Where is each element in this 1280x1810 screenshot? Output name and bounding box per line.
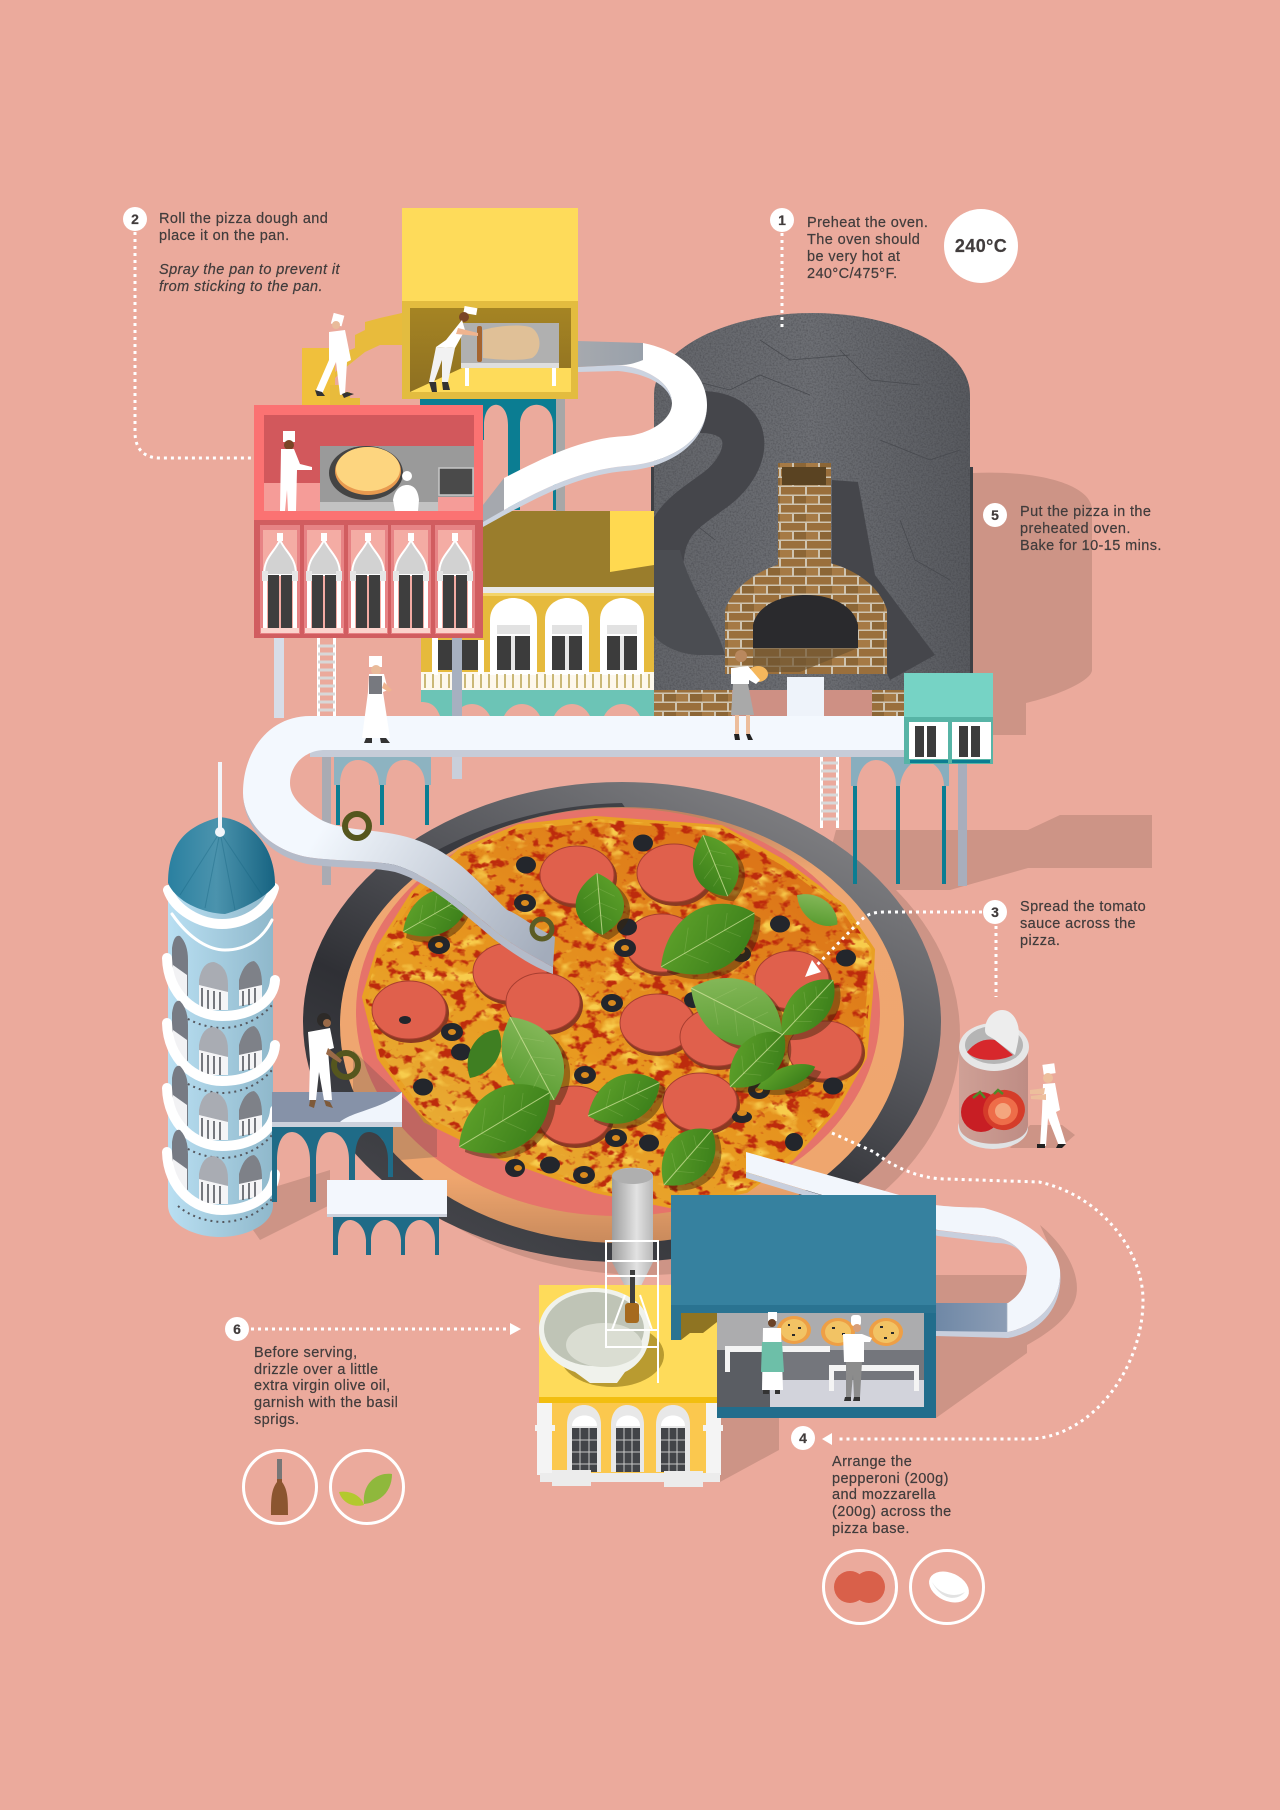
ribbon edge	[243, 793, 553, 974]
collar bands	[168, 888, 274, 924]
middle walkway ribbon	[243, 716, 905, 974]
brick arch body	[725, 560, 887, 674]
oven window	[439, 468, 473, 495]
scaffold frame	[606, 1241, 658, 1383]
brick pizza oven	[651, 463, 904, 717]
number 6: 6	[233, 1321, 241, 1337]
scaffold and oil dispenser	[606, 1241, 658, 1383]
temperature badge	[944, 209, 1018, 283]
balustrade	[421, 672, 654, 690]
roof sunlit corner	[610, 511, 654, 572]
straight white band	[340, 716, 905, 750]
tables	[725, 1346, 919, 1391]
step 4 text: (200g) across the	[832, 1504, 952, 1520]
arrow head	[510, 1323, 521, 1335]
badge 4	[791, 1426, 815, 1450]
olive ring	[334, 1053, 358, 1077]
step 6 text: sprigs.	[254, 1412, 300, 1428]
step 4 text: Arrange the	[832, 1454, 912, 1470]
cast shadows on ground	[232, 473, 1152, 1482]
oven cylinder	[654, 313, 970, 690]
bowl	[539, 1288, 650, 1383]
number 2: 2	[131, 211, 139, 227]
green olive on ribbon (upper)	[345, 814, 369, 838]
icon: olive oil bottle	[244, 1450, 316, 1524]
roof	[671, 1195, 936, 1305]
step 2 text: Roll the pizza dough and	[159, 211, 328, 227]
front	[671, 1305, 936, 1313]
ribbon grey end	[483, 478, 504, 522]
step 6 text: garnish with the basil	[254, 1395, 398, 1411]
dotted arrow	[251, 1328, 510, 1330]
sunlit end	[340, 1092, 402, 1122]
badge 3	[983, 900, 1007, 924]
walking chef	[315, 313, 354, 398]
grey pole	[556, 399, 565, 511]
step 2 note: from sticking to the pan.	[159, 279, 323, 295]
oven: stone dome	[651, 313, 973, 690]
ribbon grey start	[578, 341, 643, 367]
pizzas	[777, 1316, 903, 1346]
roof	[402, 208, 578, 301]
chef in grey trousers	[843, 1315, 872, 1401]
step 4 text: pizza base.	[832, 1521, 910, 1537]
step 6 text: drizzle over a little	[254, 1362, 378, 1378]
step 5 text: Put the pizza in the	[1020, 504, 1151, 520]
step 4	[791, 1133, 1143, 1537]
seated chef	[393, 471, 419, 511]
tower balcony floors	[167, 936, 275, 1222]
yellow middle building	[421, 511, 654, 716]
dotted line 2	[135, 232, 254, 458]
front	[904, 717, 993, 764]
right brick base	[872, 690, 904, 716]
left floor	[264, 483, 320, 511]
step 1	[770, 208, 928, 327]
blue pizza kitchen	[671, 1195, 936, 1418]
facade	[421, 589, 654, 694]
yellow bowl building	[535, 1285, 723, 1487]
step 6 text: Before serving,	[254, 1345, 358, 1361]
temperature badge: 240°C	[955, 236, 1007, 256]
step 3 text: Spread the tomato	[1020, 899, 1146, 915]
icon: mozzarella	[910, 1550, 984, 1624]
can rim	[959, 1023, 1029, 1071]
bowl shadow	[560, 1323, 664, 1387]
building shadow on oven	[654, 550, 725, 655]
pizza	[340, 807, 904, 1243]
shadow on pan	[420, 803, 640, 890]
step 2	[123, 207, 340, 458]
can chef	[1030, 1063, 1066, 1148]
badge 5	[983, 503, 1007, 527]
icon: basil sprig	[330, 1450, 404, 1524]
green olive on ribbon (lower)	[532, 919, 552, 939]
oven crack lines	[670, 340, 960, 600]
grey silo	[612, 1168, 653, 1288]
tower body	[168, 890, 273, 1237]
dome ribs	[180, 832, 262, 910]
outer edge	[936, 1270, 1060, 1338]
roof	[483, 511, 654, 587]
chef with green apron	[761, 1312, 784, 1394]
woman with apron on walkway	[362, 656, 392, 743]
standing chef	[280, 431, 312, 511]
facade windows	[432, 598, 644, 675]
top white ribbon	[483, 341, 707, 527]
number 4: 4	[799, 1430, 807, 1446]
oven base side edges	[651, 467, 973, 690]
rolled dough	[335, 447, 401, 495]
ribbon inner edge	[578, 365, 672, 403]
shaded end	[936, 1303, 1008, 1334]
oven stone texture	[654, 313, 970, 690]
step 4 text: and mozzarella	[832, 1487, 936, 1503]
white oven door block	[787, 677, 824, 717]
icon: pepperoni	[824, 1550, 896, 1624]
gap behind base	[732, 690, 872, 716]
teal arcade base	[421, 690, 654, 716]
red pizza room	[254, 405, 483, 520]
base and steps	[540, 1470, 720, 1487]
arrow head	[822, 1433, 832, 1445]
can lid	[985, 1010, 1019, 1055]
back wall	[264, 415, 474, 511]
ribbon outer edge	[483, 405, 707, 527]
can shadow	[1010, 1125, 1075, 1148]
stone quoins	[535, 1403, 723, 1475]
platform by tower	[272, 1092, 402, 1202]
step 6	[225, 1317, 521, 1428]
bowl inside	[544, 1292, 644, 1366]
step 5 text: Bake for 10-15 mins.	[1020, 538, 1162, 554]
badge 1	[770, 208, 794, 232]
number 1: 1	[778, 212, 786, 228]
cheese yellow highlights	[365, 819, 872, 1205]
step 3 text: pizza.	[1020, 933, 1060, 949]
roof	[539, 1285, 717, 1397]
can base	[958, 1107, 1028, 1149]
floor	[410, 368, 571, 392]
ladder lower	[820, 757, 839, 828]
yellow staircase	[302, 313, 402, 405]
left brick base	[651, 690, 732, 716]
roof	[904, 673, 993, 717]
can inside	[965, 1026, 1023, 1064]
teal small building	[904, 673, 993, 764]
supports below red building	[274, 638, 462, 718]
basil leaves	[393, 827, 847, 1200]
pan under dough	[329, 446, 403, 500]
step 1 text: The oven should	[807, 232, 920, 248]
arches	[272, 1127, 393, 1202]
tomato sauce	[967, 1040, 1013, 1060]
ribbon shadow on oven	[662, 412, 743, 575]
dough	[483, 326, 540, 360]
chimney shadow on oven	[832, 480, 935, 680]
lower white platform	[327, 1180, 447, 1255]
oil bottle	[625, 1303, 639, 1323]
surface	[746, 1152, 1060, 1332]
rolling pin	[477, 326, 482, 362]
teal arches under yellow room	[420, 399, 562, 510]
frame	[402, 301, 578, 399]
yellow dough room	[402, 208, 578, 399]
tomato can	[958, 1010, 1075, 1149]
frame	[254, 405, 483, 520]
number 3: 3	[991, 904, 999, 920]
cheese browned spots	[365, 819, 872, 1205]
translucent shadow of platform	[353, 1050, 437, 1160]
chimney opening	[782, 467, 826, 485]
chimney	[778, 463, 831, 575]
badge 2	[123, 207, 147, 231]
edge	[272, 1122, 402, 1127]
step 3	[805, 899, 1146, 997]
step 4 text: pepperoni (200g)	[832, 1471, 949, 1487]
sauce	[356, 808, 880, 1216]
pepperoni slices	[372, 844, 865, 1148]
worker holding olive ring	[308, 1013, 358, 1108]
windows	[909, 722, 991, 759]
leaf shadows	[396, 832, 853, 1205]
red venetian facade	[254, 520, 483, 638]
step 1 text: be very hot at	[807, 249, 900, 265]
dotted line to pizza	[815, 912, 982, 967]
can body	[959, 1050, 1028, 1144]
step 5	[983, 503, 1162, 554]
supports under walkway: right arcade	[851, 757, 967, 886]
room	[717, 1313, 924, 1407]
dotted line to can	[994, 926, 998, 997]
tomato label	[961, 1085, 1029, 1135]
ladder upper	[317, 638, 336, 718]
badge 6	[225, 1317, 249, 1341]
step 2 text: place it on the pan.	[159, 228, 290, 244]
step 3 text: sauce across the	[1020, 916, 1136, 932]
underside	[746, 1172, 1027, 1267]
number 5: 5	[991, 507, 999, 523]
ribbon surface	[504, 343, 707, 510]
dotted line 1	[780, 233, 784, 327]
crust	[340, 807, 904, 1243]
oven mouth	[753, 595, 858, 648]
pizza pan	[303, 782, 941, 1262]
dough table	[461, 323, 559, 386]
step 1 text: 240°C/475°F.	[807, 266, 898, 282]
lower ribbon	[746, 1152, 1060, 1338]
spire	[218, 762, 222, 832]
black olives	[399, 834, 856, 1184]
supports under walkway: left arcade	[322, 757, 462, 885]
olive holes	[435, 900, 763, 1178]
curved surface	[243, 716, 555, 967]
woman carrying dough	[731, 650, 768, 740]
underside	[310, 750, 905, 757]
dotted curve	[832, 1133, 1143, 1439]
step 5 text: preheated oven.	[1020, 521, 1131, 537]
top	[272, 1092, 402, 1122]
windows	[567, 1405, 690, 1472]
dome	[168, 817, 275, 914]
cheese	[365, 819, 872, 1205]
grey kitchen panel	[320, 446, 474, 511]
shaded floor of mouth	[753, 648, 858, 672]
facade	[541, 1403, 718, 1473]
arrow head	[805, 960, 821, 977]
step 1 text: Preheat the oven.	[807, 215, 928, 231]
step 2 note: Spray the pan to prevent it	[159, 262, 340, 278]
back wall	[410, 308, 571, 392]
step 6 text: extra virgin olive oil,	[254, 1378, 391, 1394]
round tower	[167, 762, 275, 1237]
chef rolling dough	[429, 306, 478, 392]
